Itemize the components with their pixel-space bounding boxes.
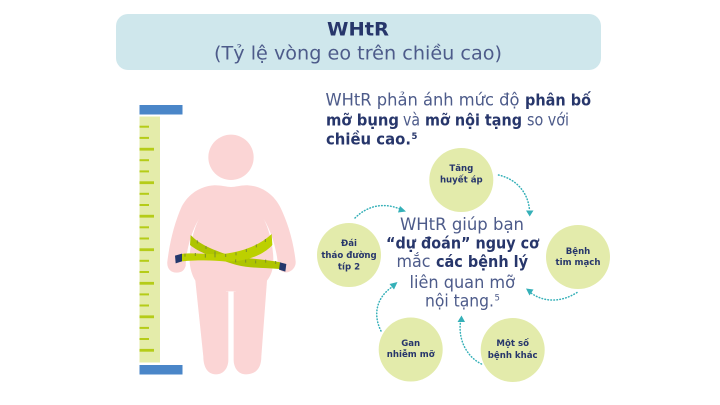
centre statement: mắc (396, 251, 430, 272)
intro paragraph: WHtR phản ánh mức độ (326, 91, 520, 110)
circle: Bệnh tim mạch (546, 225, 610, 289)
tape right end (279, 262, 286, 272)
intro paragraph: mỡ bụng (326, 111, 399, 130)
circle: Đái tháo đường típ 2: típ 2 (338, 262, 360, 272)
circle: Bệnh tim mạch: tim mạch (556, 258, 600, 268)
circle: Một số bệnh khác (481, 318, 545, 382)
tape tick marks (185, 239, 276, 264)
tape band one (190, 235, 281, 269)
circle: Bệnh tim mạch: Bệnh (566, 247, 590, 257)
arrow: Một số bệnh khác to centre (458, 316, 482, 364)
top bracket bar (140, 105, 182, 114)
arrow: Tăng huyết áp to centre (498, 175, 534, 216)
intro paragraph: 5 (412, 132, 418, 142)
circle: Gan nhiễm mỡ: nhiễm mỡ (387, 349, 436, 360)
arrow: Bệnh tim mạch to centre (526, 288, 577, 300)
centre statement: liên quan mỡ (410, 273, 516, 293)
centre statement: “dự đoán” nguy cơ (386, 233, 540, 252)
centre statement: WHtR giúp bạn (400, 215, 524, 235)
tape left end (175, 254, 182, 263)
height ruler (140, 105, 182, 374)
circle: Tăng huyết áp (429, 148, 493, 212)
arrow: Đái tháo đường to centre (355, 206, 406, 218)
intro paragraph (326, 91, 591, 148)
arrow: Gan nhiễm mỡ to centre (377, 282, 398, 331)
person figure with measuring tape (167, 135, 296, 374)
body (167, 185, 296, 374)
circle: Tăng huyết áp: huyết áp (440, 174, 483, 186)
circle: Gan nhiễm mỡ (379, 318, 443, 382)
circle: Một số bệnh khác: bệnh khác (488, 351, 538, 361)
intro paragraph: mỡ nội tạng (425, 111, 522, 130)
title: WHtR (327, 20, 389, 40)
tape band two (182, 234, 272, 262)
circle: Một số bệnh khác: Một số (496, 338, 529, 349)
intro paragraph: phân bố (525, 91, 591, 110)
intro paragraph: chiều cao. (326, 130, 411, 148)
centre statement: nội tạng. (425, 292, 494, 312)
centre statement: các bệnh lý (436, 252, 529, 271)
centre statement (386, 215, 540, 312)
circle: Đái tháo đường típ 2: Đái (341, 239, 357, 249)
circle: Đái tháo đường típ 2 (317, 223, 381, 287)
subtitle: (Tỷ lệ vòng eo trên chiều cao) (214, 42, 502, 64)
header banner (116, 14, 601, 70)
intro paragraph: so với (527, 111, 569, 130)
intro paragraph: và (403, 111, 420, 130)
bottom bracket bar (140, 365, 182, 374)
circle: Đái tháo đường típ 2: tháo đường (321, 250, 377, 261)
circle: Gan nhiễm mỡ: Gan (401, 339, 420, 349)
centre statement: 5 (494, 294, 500, 304)
circle: Tăng huyết áp: Tăng (449, 164, 473, 174)
ruler strip with ticks (140, 116, 160, 362)
head (208, 135, 254, 180)
